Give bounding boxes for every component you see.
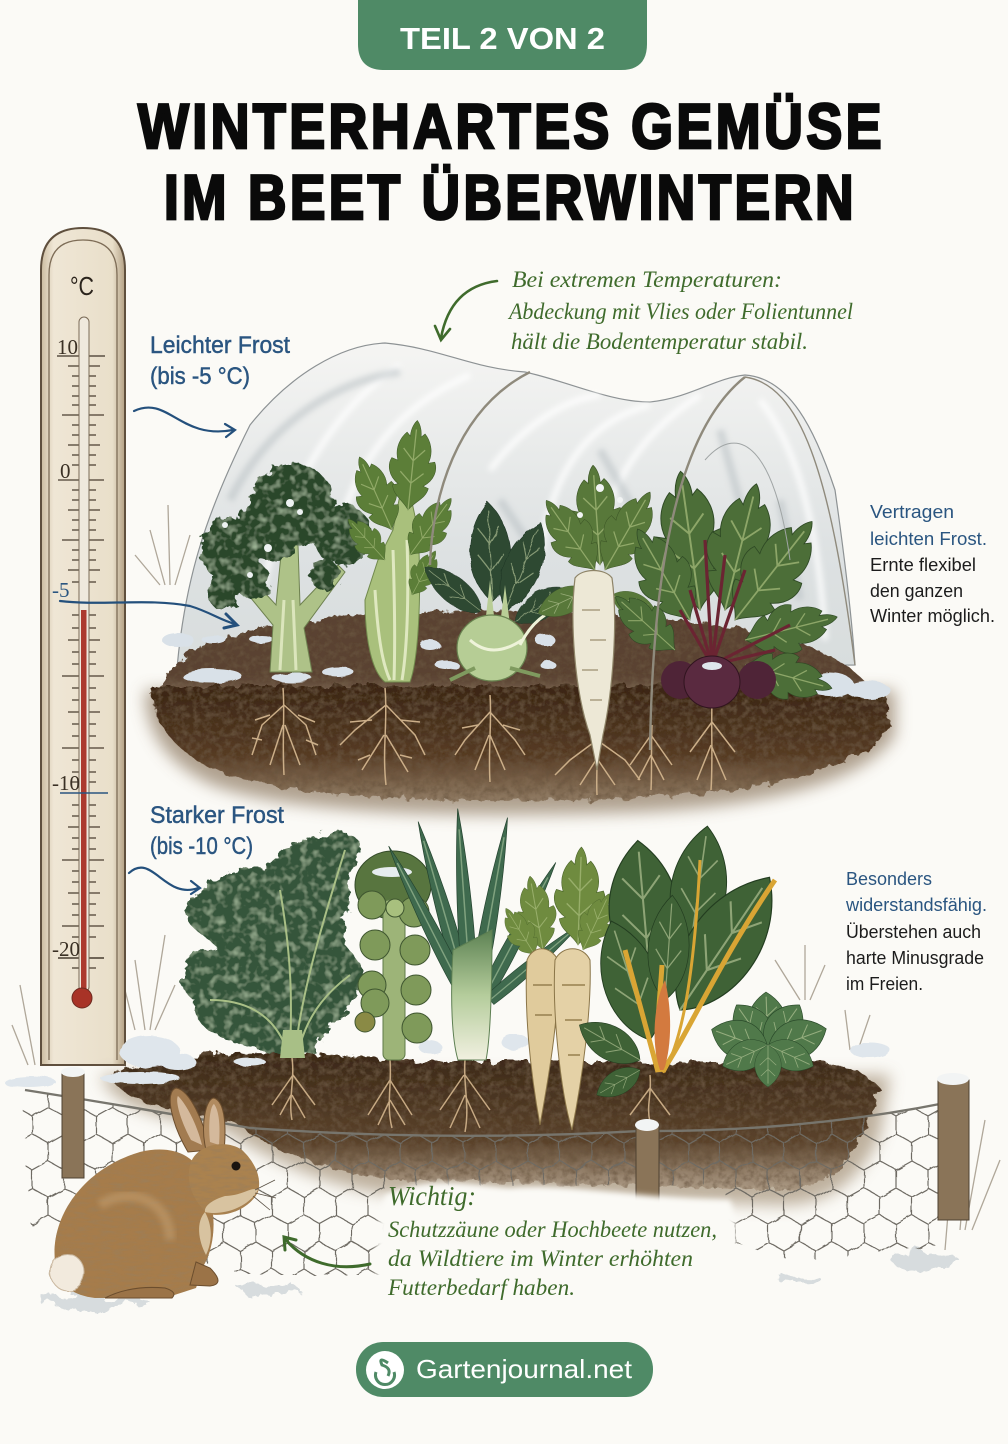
thermometer numbers: -20	[52, 937, 80, 961]
thermometer unit: °C	[70, 271, 94, 301]
callout: wildlife note: Schutzzäune oder Hochbeete nutzen,	[388, 1217, 717, 1242]
row 1 roots	[252, 688, 735, 795]
footer logo pill: Gartenjournal.net	[416, 1354, 633, 1384]
tunnel hoops	[430, 372, 855, 750]
soil halo row 2	[100, 1075, 890, 1205]
row 1: celery	[338, 418, 466, 682]
florets	[200, 463, 372, 608]
arrow: light frost to tunnel	[134, 408, 235, 437]
label: Leichter Frost: (bis -5 °C)	[150, 363, 250, 390]
soil surface behind row 1	[150, 610, 880, 695]
text: row 2 description	[845, 869, 987, 994]
thermometer numbers: -10	[52, 771, 80, 795]
thermometer	[41, 228, 125, 1065]
soil band row 2	[108, 1053, 880, 1190]
callout: tunnel note: Abdeckung mit Vlies oder Folientunnel	[507, 299, 853, 324]
body	[55, 1149, 214, 1298]
thermometer numbers	[52, 335, 80, 961]
text: row 1 description: Winter möglich.	[870, 606, 995, 626]
thermometer numbers: -5	[52, 578, 70, 602]
badge: Teil 2 von 2: TEIL 2 VON 2	[400, 21, 605, 56]
label: Leichter Frost: Leichter Frost	[150, 332, 290, 359]
row 2: lamb's lettuce	[705, 991, 833, 1087]
fence	[22, 1067, 969, 1275]
text: row 1 description: Ernte flexibel	[870, 555, 976, 575]
callout: wildlife note: Wichtig:	[388, 1181, 476, 1211]
row 2: kale	[183, 832, 360, 1058]
row 1: beetroot	[602, 466, 843, 711]
badge: Teil 2 von 2	[358, 0, 647, 70]
text: row 2 description: im Freien.	[846, 974, 923, 994]
callout: tunnel note: Bei extremen Temperaturen:	[512, 267, 782, 292]
ears	[170, 1088, 210, 1152]
thermometer tube	[79, 317, 89, 992]
label: Leichter Frost	[150, 332, 290, 390]
chest	[199, 1212, 211, 1255]
arrow: note to fence	[284, 1237, 370, 1267]
wire mesh	[22, 1090, 945, 1275]
label: Starker Frost: (bis -10 °C)	[150, 833, 253, 860]
snow ground	[40, 1252, 959, 1308]
thermometer scale ticks	[58, 366, 104, 968]
arrow: strong frost to kale	[129, 868, 200, 894]
tail	[50, 1254, 84, 1290]
background grass tufts	[12, 505, 1000, 1250]
text: row 1 description: Vertragen	[870, 502, 954, 522]
row 1: daikon	[528, 463, 670, 770]
title	[138, 92, 885, 233]
rabbit	[50, 1088, 276, 1298]
fence posts	[62, 1072, 969, 1220]
tunnel cover	[177, 343, 855, 668]
row 2: leek	[382, 808, 585, 1060]
callout background	[376, 1183, 736, 1310]
footer logo pill	[356, 1342, 653, 1397]
row 1: broccoli	[200, 463, 372, 672]
title: IM BEET ÜBERWINTERN	[164, 163, 857, 233]
feet	[105, 1287, 174, 1298]
snow row 1	[162, 633, 890, 699]
text: row 2 description: Besonders	[846, 869, 932, 889]
callout: tunnel note	[507, 267, 853, 354]
callout: wildlife note: da Wildtiere im Winter erhöhten	[388, 1246, 693, 1271]
callout: wildlife note: Futterbedarf haben.	[387, 1275, 575, 1300]
soil band row 1	[152, 686, 890, 801]
row 2 roots	[272, 1058, 670, 1132]
row 2: chard	[571, 822, 798, 1105]
arrow: note to tunnel	[435, 281, 497, 340]
label: Starker Frost: Starker Frost	[150, 802, 284, 829]
title: WINTERHARTES GEMÜSE	[138, 92, 885, 162]
thermometer numbers: 0	[60, 459, 70, 483]
arrow: minus five to broccoli	[60, 601, 237, 628]
row 1: kohlrabi	[417, 501, 575, 681]
logo icon	[366, 1351, 404, 1389]
thermometer numbers: 10	[57, 335, 78, 359]
label: Starker Frost	[150, 802, 284, 860]
text: row 1 description	[870, 502, 995, 626]
snow row 2	[4, 1034, 890, 1088]
text: row 1 description: den ganzen	[870, 581, 963, 601]
top wire	[25, 1090, 945, 1136]
soil halo row 1	[145, 690, 895, 815]
row 2: brussels sprouts	[355, 851, 432, 1060]
text: row 1 description: leichten Frost.	[870, 529, 987, 549]
row 2: parsnips	[494, 846, 624, 1130]
text: row 2 description: Überstehen auch	[846, 922, 981, 942]
callout: wildlife note	[387, 1181, 717, 1300]
text: row 2 description: widerstandsfähig.	[845, 895, 987, 915]
callout: tunnel note: hält die Bodentemperatur stabil.	[511, 329, 808, 354]
stalk	[232, 545, 345, 672]
head	[189, 1144, 259, 1215]
text: row 2 description: harte Minusgrade	[846, 948, 984, 968]
